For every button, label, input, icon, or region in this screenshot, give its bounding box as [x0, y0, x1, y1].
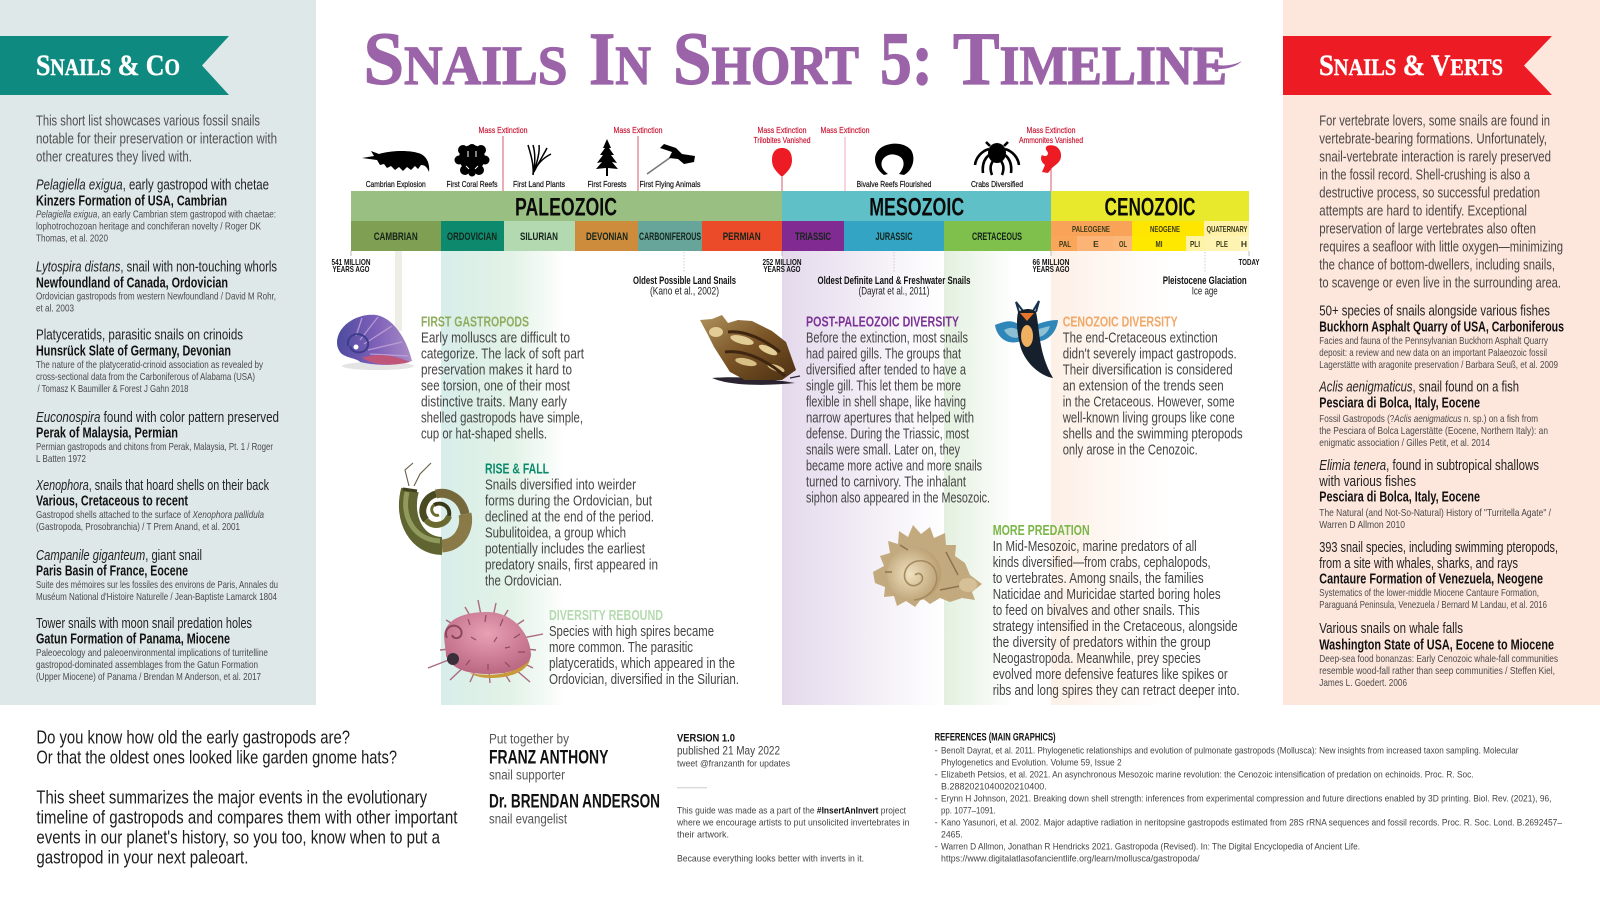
text block: first gastropods: shelled gastropods have simple, — [421, 411, 583, 427]
mass extinction markers: Mass Extinction — [478, 125, 528, 135]
entry: Platyceratids — [36, 328, 264, 395]
footer: references: 2465. — [941, 829, 963, 840]
footer: summary text: Or that the oldest ones looked like garden gnome hats? — [36, 747, 397, 767]
icon: first flying animals — [640, 144, 700, 189]
entry: Euconospira: L Batten 1972 — [36, 453, 86, 465]
period band: TRIASSIC — [795, 231, 831, 243]
text block: post-paleozoic diversity: defense. During the Triassic, most — [806, 427, 969, 443]
icon: first coral reefs — [446, 144, 498, 189]
icon: first forests: First Forests — [588, 179, 626, 189]
title: IN — [589, 18, 651, 101]
entry: Pelagiella: Pelagiella exigua, early gastropod with chetae — [36, 178, 269, 194]
cenozoic sub-periods: OL — [1119, 239, 1127, 249]
illustration: pink spiky snail — [428, 600, 543, 683]
text block: diversity rebound: more common. The parasitic — [549, 640, 693, 656]
event: pleistocene glaciation — [1163, 252, 1247, 297]
text block: diversity rebound: DIVERSITY REBOUND — [549, 607, 663, 624]
footer: credits: Dr. BRENDAN ANDERSON — [489, 792, 660, 813]
period band: DEVONIAN — [586, 231, 628, 243]
entry: Aclis: Fossil Gastropods (?Aclis aenigmaticus n. sp.) on a fish from — [1319, 413, 1538, 425]
text block: cenozoic diversity: CENOZOIC DIVERSITY — [1063, 314, 1178, 331]
panel: snails and co — [0, 36, 279, 683]
entry: Xenophora: Xenophora, snails that hoard shells on their back — [35, 478, 270, 494]
icon: cambrian explosion — [362, 151, 429, 189]
entry: Campanile: Paris Basin of France, Eocene — [36, 564, 188, 580]
entry: Lytospira — [36, 260, 277, 315]
entry: Platyceratids: Platyceratids, parasitic snails on crinoids — [36, 328, 243, 344]
text block: diversity rebound: Ordovician, diversified in the Silurian. — [549, 672, 739, 688]
intro text — [36, 114, 277, 166]
entry: Elimia: Warren D Allmon 2010 — [1319, 519, 1405, 531]
text block: rise and fall: the Ordovician. — [485, 573, 562, 589]
title: SHORT — [673, 18, 859, 101]
footer: version: tweet @franzanth for updates — [677, 759, 790, 770]
footer: references: B.2882021040020210400. — [941, 781, 1047, 792]
text block: cenozoic diversity: Their diversification is considered — [1063, 363, 1233, 379]
entry: Campanile — [36, 548, 278, 603]
footer: summary text — [36, 727, 457, 867]
text block: post-paleozoic diversity: diversified after tended to have a — [806, 363, 967, 379]
event: oldest definite land and freshwater snails — [818, 252, 970, 297]
cenozoic sub-periods: PALEOGENE — [1072, 224, 1110, 234]
mass extinction markers: Ammonites Vanished — [1019, 135, 1083, 145]
intro text — [1319, 113, 1563, 291]
footer: references: Benoît Dayrat, et al. 2011. Phylogenetic relationships and evolution of pulmonate gastropods (Mollusca): New insights from increased taxon sampling. Molecular — [941, 745, 1518, 756]
title: SNAILS — [364, 18, 568, 101]
cenozoic sub-periods: E — [1093, 239, 1099, 249]
text block: rise and fall: predatory snails, first appeared in — [485, 557, 658, 573]
entry: Elimia: with various fishes — [1318, 474, 1416, 490]
date labels: 252 MILLION — [762, 257, 802, 267]
text block: post-paleozoic diversity: became more active and more snails — [806, 459, 982, 475]
text block: rise and fall: potentially includes the earliest — [485, 541, 645, 557]
entry: Tower snails: (Upper Miocene) of Panama / Brendan M Anderson, et al. 2017 — [36, 671, 261, 683]
mass extinction markers: Mass Extinction — [758, 125, 807, 135]
banner: snails and co: SNAILS & CO — [36, 49, 180, 82]
footer: references: Elizabeth Petsios, et al. 2021. An asynchronous Mesozoic marine revolution: the Cenozoic intensification of predation on echinoids. Proc. R. Soc. — [941, 769, 1474, 780]
text block: diversity rebound: Species with high spires became — [549, 624, 714, 640]
icon: trilobite — [772, 148, 792, 176]
era band: CENOZOIC — [1104, 194, 1196, 222]
entry: Aclis: enigmatic association / Gilles Petit, et al. 2014 — [1319, 437, 1490, 449]
entry: Washington — [1319, 621, 1558, 689]
footer: references: Warren D Allmon, Jonathan R Hendricks 2021. Gastropoda (Revised). In: The Digital Encyclopedia of Ancient Life. — [941, 841, 1360, 852]
panel: snails and verts — [1283, 36, 1564, 689]
footer: references: - — [935, 769, 938, 780]
cenozoic sub-periods: NEOGENE — [1150, 224, 1180, 234]
timeline chart — [332, 125, 1260, 297]
text block: more predation: to feed on bivalves and other snails. This — [993, 603, 1200, 619]
text block: cenozoic diversity: didn't severely impact gastropods. — [1063, 347, 1237, 363]
entry: Cantaure: from a site with whales, sharks, and rays — [1319, 556, 1518, 572]
entry: Lytospira: Newfoundland of Canada, Ordovician — [36, 276, 228, 292]
entry: Aclis: Pesciara di Bolca, Italy, Eocene — [1319, 396, 1480, 412]
illustration: purple snail — [337, 315, 414, 370]
cenozoic sub-periods: PLE — [1216, 239, 1228, 249]
text block: cenozoic diversity — [1062, 314, 1243, 459]
text block: post-paleozoic diversity: single gill. This let them be more — [806, 379, 961, 395]
text block: post-paleozoic diversity — [806, 314, 990, 507]
footer: version: published 21 May 2022 — [677, 744, 780, 758]
entry: Lytospira: Lytospira distans, snail with non-touching whorls — [36, 260, 277, 276]
footer: credits — [489, 731, 660, 826]
text block: more predation: MORE PREDATION — [993, 522, 1090, 539]
entry: Platyceratids: / Tomasz K Baumiller & Forest J Gahn 2018 — [38, 383, 189, 395]
footer: version: This guide was made as a part of the #InsertAnInvert project — [677, 805, 906, 816]
icon: first coral reefs: First Coral Reefs — [446, 179, 498, 189]
illustration: beige shell — [873, 525, 982, 607]
footer: credits: snail evangelist — [489, 811, 567, 826]
icon: first land plants: First Land Plants — [513, 179, 565, 189]
banner: snails and co — [0, 36, 229, 95]
cenozoic sub-periods — [1051, 221, 1249, 251]
footer: references: REFERENCES (MAIN GRAPHICS) — [935, 732, 1056, 744]
text block: post-paleozoic diversity: Before the extinction, most snails — [806, 331, 968, 347]
icon: bivalve reefs — [857, 144, 932, 189]
period band: JURASSIC — [876, 231, 913, 243]
text block: post-paleozoic diversity: turned to carnivory. The inhalant — [806, 475, 966, 491]
period band: CARBONIFEROUS — [639, 231, 701, 243]
entry: Tower snails — [36, 616, 268, 683]
footer: version: their artwork. — [677, 829, 729, 840]
intro text: This short list showcases various fossil snails — [36, 114, 260, 130]
event: pleistocene glaciation: Ice age — [1192, 285, 1218, 297]
illustration: coiled green snail — [403, 463, 466, 546]
footer: version: VERSION 1.0 — [677, 733, 735, 745]
text block: post-paleozoic diversity: had paired gills. The groups that — [806, 347, 961, 363]
illustration: brown shell — [700, 315, 800, 385]
footer: summary text: gastropod in your next paleoart. — [36, 847, 248, 867]
entry: Euconospira: Permian gastropods and chitons from Perak, Malaysia, Pt. 1 / Roger — [36, 441, 273, 453]
entry: Euconospira: Euconospira found with color pattern preserved — [36, 410, 279, 426]
text block: first gastropods: Early molluscs are difficult to — [421, 331, 570, 347]
entry: Tower snails: Gatun Formation of Panama, Miocene — [36, 631, 230, 647]
entry: Elimia: Pesciara di Bolca, Italy, Eocene — [1319, 490, 1480, 506]
entry: Platyceratids: Hunsrück Slate of Germany, Devonian — [36, 344, 231, 360]
date labels: YEARS AGO — [1032, 264, 1070, 274]
footer: references: pp. 1077–1091. — [941, 805, 996, 816]
text block: more predation: Naticidae and Muricidae started boring holes — [993, 587, 1221, 603]
entry: Euconospira: Perak of Malaysia, Permian — [36, 426, 178, 442]
entry: Campanile: Suite des mémoires sur les fossiles des environs de Paris, Annales du — [36, 579, 278, 591]
era band: PALEOZOIC — [515, 194, 617, 222]
date labels: YEARS AGO — [764, 264, 801, 274]
event: oldest possible land snails: Oldest Possible Land Snails — [633, 275, 736, 287]
event: oldest possible land snails: (Kano et al., 2002) — [650, 285, 719, 297]
entry: Tower snails: Paleoecology and paleoenvironmental implications of turritelline — [36, 647, 268, 659]
entry: Lytospira: et al. 2003 — [36, 303, 74, 315]
footer: references — [935, 732, 1563, 864]
text block: rise and fall: RISE & FALL — [485, 460, 549, 477]
text block: post-paleozoic diversity: POST-PALEOZOIC DIVERSITY — [806, 314, 959, 331]
footer: references: - — [935, 793, 938, 804]
illustration: pteropod — [995, 301, 1058, 378]
entry: Lytospira: Ordovician gastropods from western Newfoundland / David M Rohr, — [36, 291, 276, 303]
footer: summary text: Do you know how old the early gastropods are? — [36, 727, 350, 747]
intro text: preservation of large vertebrates also often — [1319, 221, 1536, 237]
mass extinction markers: Mass Extinction — [1026, 125, 1076, 135]
text block: more predation — [993, 522, 1240, 699]
banner: snails and verts: SNAILS & VERTS — [1319, 49, 1503, 82]
text block: first gastropods: distinctive traits. Many early — [421, 395, 568, 411]
era colour columns behind the text — [395, 251, 1171, 705]
entry: Washington: Various snails on whale falls — [1319, 621, 1463, 637]
text block: more predation: evolved more defensive features like spikes or — [993, 667, 1228, 683]
entry: Washington: James L. Goedert. 2006 — [1319, 677, 1407, 689]
entry: Euconospira — [36, 410, 279, 465]
text block: rise and fall — [485, 460, 658, 589]
text block: first gastropods: categorize. The lack of soft part — [421, 347, 584, 363]
entry: Xenophora: Various, Cretaceous to recent — [36, 494, 188, 510]
text block: more predation: strategy intensified in the Cretaceous, alongside — [993, 619, 1238, 635]
entry: Pelagiella: lophotrochozoan heritage and conchiferan novelty / Roger DK — [36, 221, 261, 233]
entry: Aclis: Aclis aenigmaticus, snail found on a fish — [1319, 380, 1519, 396]
footer: version — [676, 733, 909, 864]
period band — [351, 221, 1051, 251]
mass extinction markers: Mass Extinction — [820, 125, 870, 135]
banner: snails and verts — [1283, 36, 1552, 95]
text block: post-paleozoic diversity: flexible in shell shape, like having — [806, 395, 966, 411]
text block: post-paleozoic diversity: snails were small. Later on, they — [806, 443, 961, 459]
entry: Pelagiella — [36, 178, 276, 245]
panel: snails and co background — [0, 0, 316, 705]
title: 5: — [880, 18, 933, 101]
icon: ammonite — [1041, 145, 1061, 173]
title — [364, 18, 1242, 101]
period band: PERMIAN — [723, 231, 761, 243]
entry: Xenophora: (Gastropoda, Prosobranchia) / T Prem Anand, et al. 2001 — [36, 521, 240, 533]
intro text: other creatures they lived with. — [36, 150, 192, 166]
date labels: TODAY — [1238, 257, 1260, 267]
footer: references: Phylogenetics and Evolution. Volume 59, Issue 2 — [941, 757, 1122, 768]
text block: cenozoic diversity: well-known living groups like cone — [1062, 411, 1235, 427]
period band: SILURIAN — [520, 231, 558, 243]
icon: crabs diversified: Crabs Diversified — [971, 179, 1023, 189]
text block: rise and fall: Snails diversified into weirder — [485, 477, 636, 493]
text block: post-paleozoic diversity: narrow apertures that helped with — [806, 411, 974, 427]
event: pleistocene glaciation: Pleistocene Glaciation — [1163, 275, 1247, 287]
footer: references: https://www.digitalatlasofancientlife.org/learn/mollusca/gastropoda/ — [941, 853, 1200, 864]
entry: Elimia: Elimia tenera, found in subtropical shallows — [1319, 458, 1539, 474]
panel: snails and verts background — [1283, 0, 1600, 705]
intro text: attempts are hard to identify. Exceptional — [1319, 203, 1527, 219]
text block: more predation: ribs and long spires they can retract deeper into. — [993, 683, 1240, 699]
footer: references: - — [935, 841, 938, 852]
footer: summary text: events in our planet's history, so you too, know when to put a — [36, 827, 441, 847]
footer: version: Because everything looks better with inverts in it. — [677, 853, 864, 864]
icon: first land plants — [513, 145, 565, 189]
cenozoic sub-periods: H — [1241, 239, 1247, 249]
text block: first gastropods: preservation makes it hard to — [421, 363, 572, 379]
text block: first gastropods — [421, 314, 584, 443]
event: oldest definite land and freshwater snails: Oldest Definite Land & Freshwater Snails — [818, 275, 970, 287]
date labels — [332, 251, 1260, 274]
entry: Platyceratids: cross-sectional data from the Carboniferous of Alabama (USA) — [36, 371, 255, 383]
entry: Pelagiella: Pelagiella exigua, an early Cambrian stem gastropod with chaetae: — [36, 209, 276, 221]
text block: more predation: Neogastropoda. Meanwhile, prey species — [993, 651, 1201, 667]
icon: cambrian explosion: Cambrian Explosion — [366, 179, 426, 189]
text block: diversity rebound: platyceratids, which appeared in the — [549, 656, 735, 672]
entry: Campanile: Campanile giganteum, giant snail — [36, 548, 202, 564]
entry: Xenophora — [35, 478, 270, 533]
period band: CRETACEOUS — [972, 231, 1022, 243]
cenozoic sub-periods: MI — [1156, 239, 1162, 249]
entry: Cantaure — [1319, 540, 1558, 611]
text block: cenozoic diversity: only arose in the Cenozoic. — [1063, 443, 1198, 459]
text block: rise and fall: Subulitoidea, a group which — [485, 525, 626, 541]
footer: summary text: timeline of gastropods and compares them with other important — [36, 807, 457, 827]
era band — [351, 191, 1249, 222]
entry: Tower snails: Tower snails with moon snail predation holes — [36, 616, 252, 632]
entry: Xenophora: Gastropod shells attached to the surface of Xenophora pallidula — [36, 509, 264, 521]
entry: Aclis — [1319, 380, 1548, 449]
footer: references: - — [935, 817, 938, 828]
text block: first gastropods: cup or hat-shaped shells. — [421, 427, 547, 443]
intro text: vertebrate-bearing formations. Unfortunately, — [1319, 131, 1547, 147]
icon: first flying animals: First Flying Animals — [640, 179, 700, 189]
entry: Buckhorn — [1319, 304, 1564, 371]
entry: Platyceratids: The nature of the platyceratid-crinoid association as revealed by — [36, 359, 264, 371]
footer: credits: FRANZ ANTHONY — [489, 747, 609, 768]
entry: Aclis: the Pesciara of Bolca Lagerstätte (Eocene, Northern Italy): an — [1319, 425, 1548, 437]
text block: more predation: In Mid-Mesozoic, marine predators of all — [993, 539, 1197, 555]
text block: cenozoic diversity: an extension of the trends seen — [1063, 379, 1224, 395]
text block: first gastropods: see torsion, one of their most — [421, 379, 570, 395]
entry: Pelagiella: Kinzers Formation of USA, Cambrian — [36, 194, 227, 210]
footer: credits: Put together by — [489, 731, 569, 746]
text block: more predation: to vertebrates. Among snails, the families — [993, 571, 1204, 587]
era band: MESOZOIC — [869, 194, 964, 222]
text block: post-paleozoic diversity: siphon also appeared in the Mesozoic. — [806, 491, 990, 507]
entry: Elimia: The Natural (and Not-So-Natural) History of "Turritella Agate" / — [1319, 507, 1551, 519]
entry: Tower snails: gastropod-dominated assemblages from the Gatun Formation — [36, 659, 258, 671]
period band: CAMBRIAN — [374, 231, 418, 243]
date labels: 66 MILLION — [1032, 257, 1070, 267]
event: oldest possible land snails — [633, 252, 736, 297]
mass extinction markers: Mass Extinction — [614, 125, 663, 135]
cenozoic sub-periods: PAL — [1059, 239, 1071, 249]
icon: first forests — [588, 139, 626, 189]
footer: summary text: This sheet summarizes the major events in the evolutionary — [36, 787, 427, 807]
text block: more predation: kinds diversified—from crabs, cephalopods, — [993, 555, 1211, 571]
period band: ORDOVICIAN — [447, 231, 497, 243]
footer: credits: snail supporter — [489, 767, 565, 782]
text block: cenozoic diversity: The end-Cretaceous extinction — [1063, 331, 1218, 347]
mass extinction markers — [478, 125, 1083, 191]
cenozoic sub-periods: QUATERNARY — [1206, 224, 1248, 234]
text block: cenozoic diversity: shells and the swimming pteropods — [1063, 427, 1243, 443]
text block: rise and fall: declined at the end of the period. — [485, 509, 654, 525]
intro text: in the fossil record. Shell-crushing is also a — [1319, 167, 1531, 183]
footer: version: where we encourage artists to put unsolicited invertebrates in — [676, 817, 909, 828]
intro text: notable for their preservation or interaction with — [36, 132, 277, 148]
date labels: 541 MILLION — [332, 257, 370, 267]
text block: rise and fall: forms during the Ordovician, but — [485, 493, 652, 509]
text block: more predation: the diversity of predators within the group — [993, 635, 1211, 651]
intro text: destructive process, so successful predation — [1319, 185, 1540, 201]
entry: Campanile: Muséum National d'Histoire Naturelle / Jean-Baptiste Lamarck 1804 — [36, 591, 277, 603]
text block: first gastropods: FIRST GASTROPODS — [421, 314, 529, 331]
entry: Pelagiella: Thomas, et al. 2020 — [36, 233, 108, 245]
event: oldest definite land and freshwater snails: (Dayrat et al., 2011) — [858, 285, 930, 297]
cenozoic sub-periods: PLI — [1190, 239, 1200, 249]
text block: cenozoic diversity: in the Cretaceous. However, some — [1063, 395, 1235, 411]
icon: bivalve reefs: Bivalve Reefs Flourished — [857, 179, 932, 189]
icon: crabs diversified — [971, 142, 1023, 189]
entry: Elimia — [1318, 458, 1551, 531]
title: TIMELINE — [953, 18, 1227, 101]
mass extinction markers: Trilobites Vanished — [754, 135, 811, 145]
text block: diversity rebound — [549, 607, 739, 688]
date labels: YEARS AGO — [332, 264, 370, 274]
footer: references: - — [935, 745, 938, 756]
